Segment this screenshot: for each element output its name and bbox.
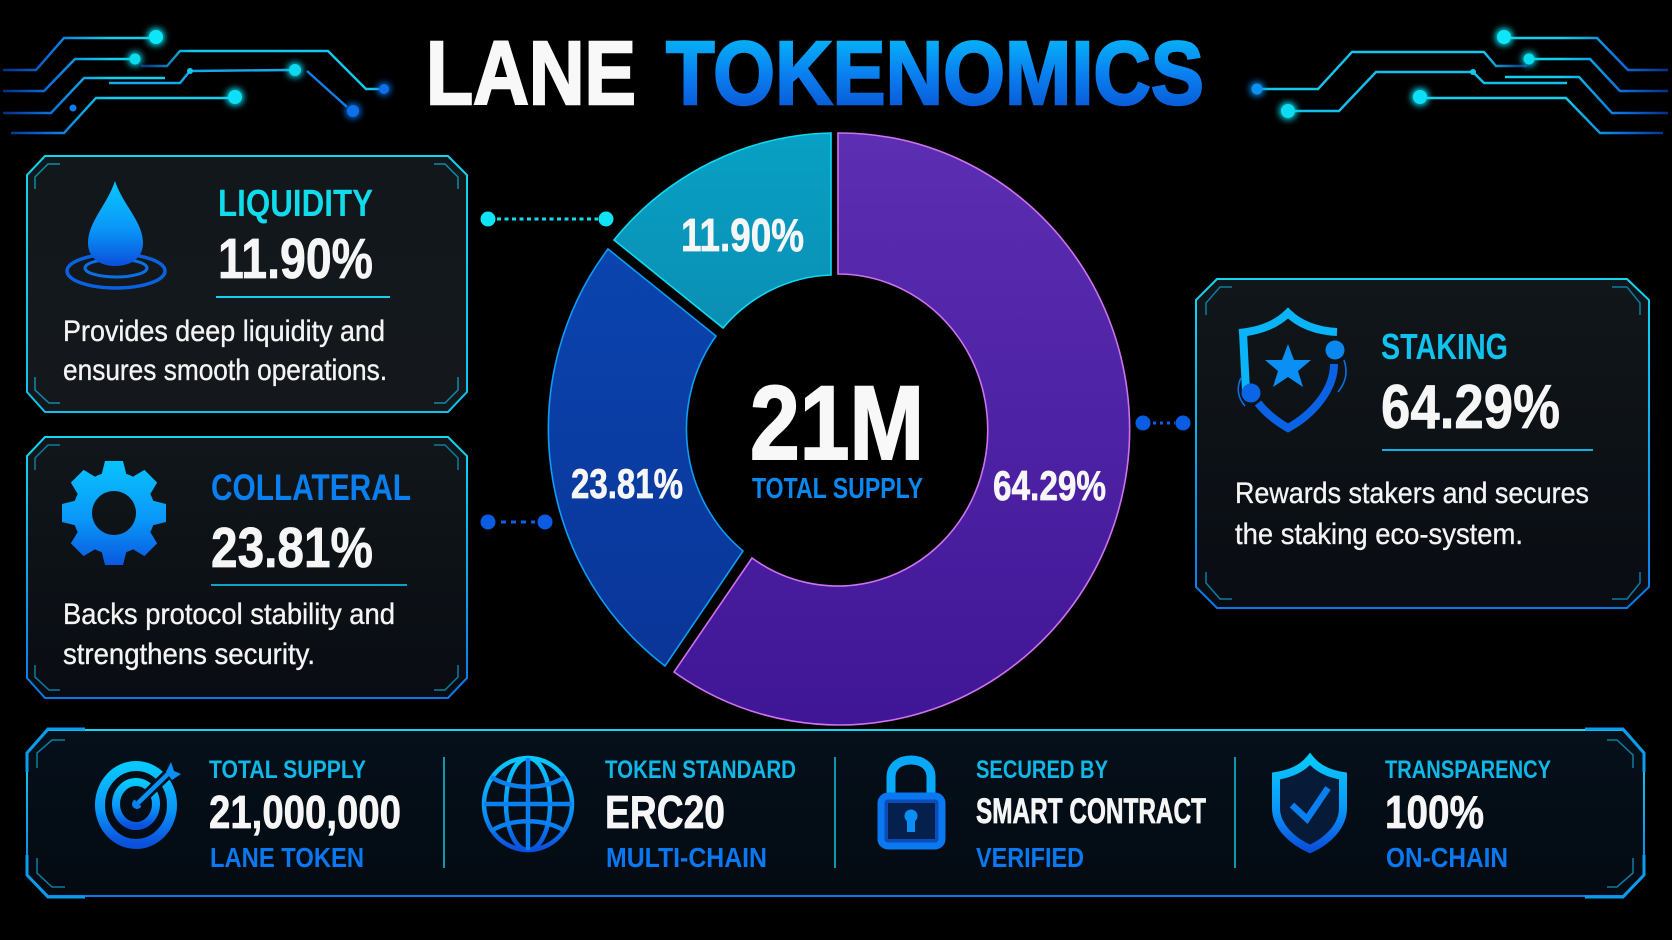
- title: TOKENOMICS: [666, 24, 1204, 124]
- icon: padlock: [881, 760, 942, 846]
- value: staking: 64.29%: [1381, 373, 1560, 442]
- value label: staking: 64.29%: [993, 462, 1106, 509]
- center total: 21M: [750, 365, 924, 482]
- connector: liquidity: [480, 212, 614, 226]
- stat: secured by: [881, 756, 1206, 873]
- segment: staking 64.29%: [674, 133, 1130, 725]
- title: LANE: [426, 24, 636, 124]
- icon: gear: [62, 461, 166, 565]
- connector: staking: [1136, 416, 1190, 430]
- panel: bottom stats: [27, 729, 1644, 897]
- description: staking: [1235, 477, 1589, 551]
- description: staking: the staking eco-system.: [1235, 518, 1523, 551]
- description: collateral: [63, 598, 395, 671]
- segment: collateral 23.81%: [548, 249, 743, 666]
- donut chart: [548, 133, 1130, 725]
- text: total supply: LANE TOKEN: [210, 842, 364, 873]
- icon: target: [100, 762, 181, 844]
- value label: collateral: 23.81%: [571, 460, 683, 507]
- icon: globe: [484, 758, 572, 850]
- text: token standard: ERC20: [605, 786, 725, 838]
- icon: shield with star: [1238, 313, 1346, 428]
- connector: collateral: [480, 514, 552, 530]
- value: collateral: 23.81%: [211, 516, 373, 580]
- icon: shield with check: [1276, 759, 1343, 849]
- circuit decoration: left: [3, 30, 389, 133]
- text: token standard: [605, 756, 796, 873]
- label: liquidity: LIQUIDITY: [218, 183, 373, 225]
- stat: transparency: [1276, 756, 1551, 873]
- text: transparency: ON-CHAIN: [1386, 842, 1508, 873]
- stat: token standard: [484, 756, 796, 873]
- panel: collateral: [27, 437, 467, 698]
- text: token standard: MULTI-CHAIN: [606, 842, 767, 873]
- text: total supply: TOTAL SUPPLY: [209, 756, 366, 784]
- text: token standard: TOKEN STANDARD: [605, 756, 796, 784]
- label: staking: STAKING: [1381, 326, 1508, 367]
- title: [426, 24, 1204, 124]
- description: liquidity: [63, 315, 387, 387]
- label: collateral: COLLATERAL: [211, 467, 411, 508]
- description: staking: Rewards stakers and secures: [1235, 477, 1589, 510]
- text: secured by: SECURED BY: [976, 756, 1108, 784]
- value label: liquidity: 11.90%: [681, 209, 804, 261]
- text: secured by: SMART CONTRACT: [976, 792, 1206, 831]
- circuit decoration: right: [1252, 30, 1668, 133]
- segment: liquidity 11.90%: [614, 133, 831, 328]
- description: liquidity: Provides deep liquidity and: [63, 315, 385, 348]
- text: transparency: 100%: [1385, 786, 1484, 838]
- description: collateral: strengthens security.: [63, 638, 315, 671]
- description: liquidity: ensures smooth operations.: [63, 354, 387, 387]
- text: total supply: 21,000,000: [209, 786, 401, 838]
- text: transparency: TRANSPARENCY: [1385, 756, 1551, 784]
- text: secured by: [976, 756, 1206, 873]
- stat: total supply: [100, 756, 401, 873]
- description: collateral: Backs protocol stability and: [63, 598, 395, 631]
- text: transparency: [1385, 756, 1551, 873]
- center total: TOTAL SUPPLY: [752, 473, 923, 505]
- value: liquidity: 11.90%: [218, 227, 373, 291]
- icon: water drop: [67, 181, 165, 288]
- text: secured by: VERIFIED: [976, 842, 1084, 873]
- panel: liquidity: [27, 156, 467, 412]
- text: total supply: [209, 756, 401, 873]
- panel: staking: [1196, 279, 1649, 608]
